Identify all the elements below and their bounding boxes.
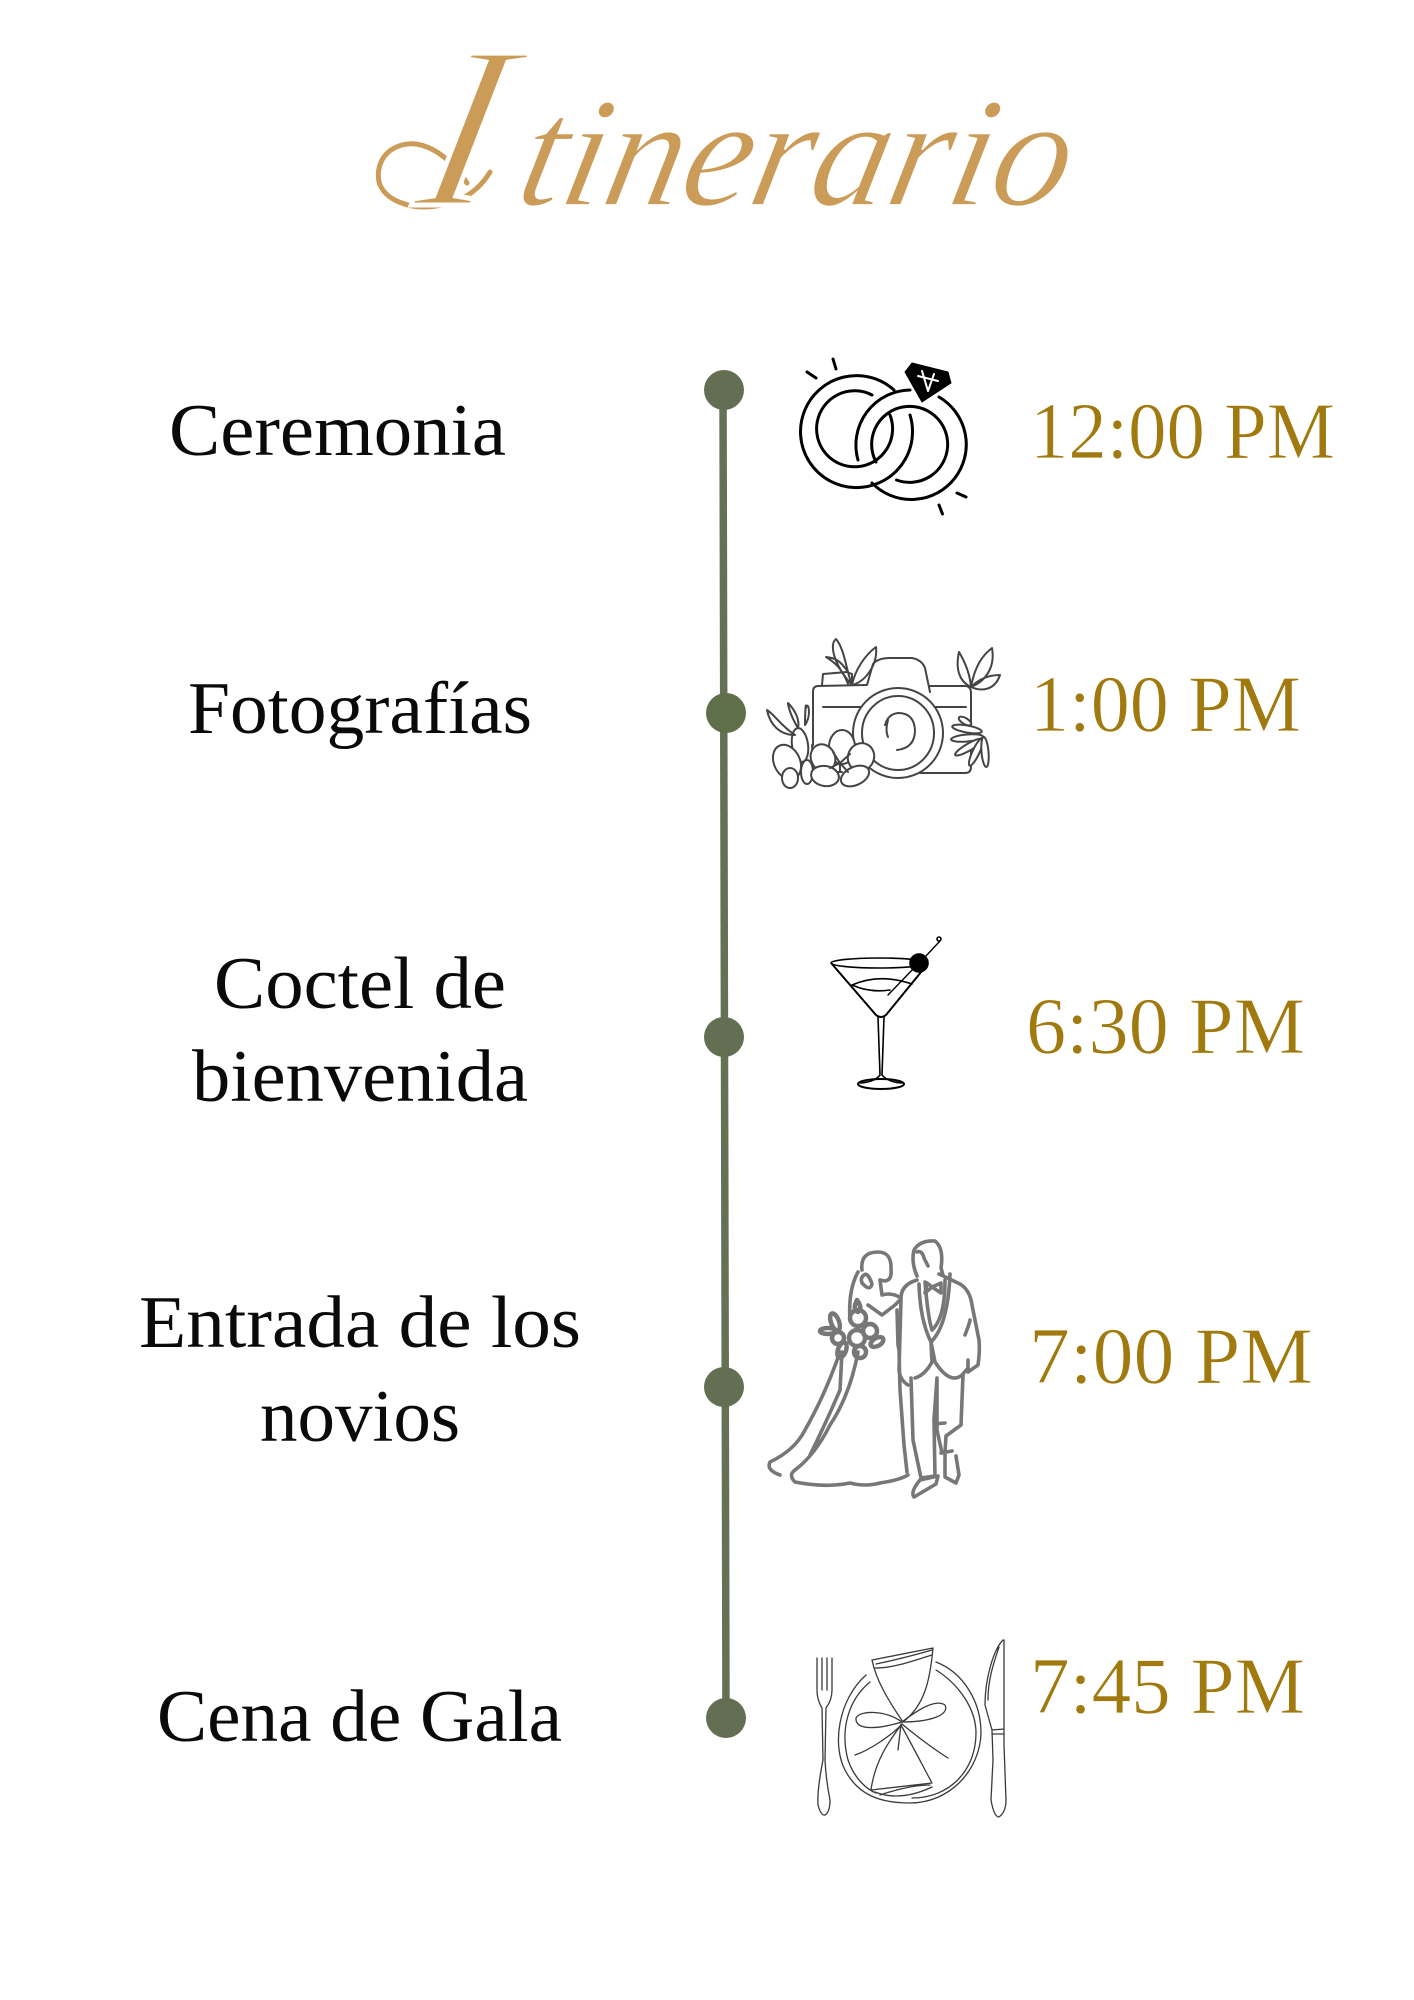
time: 7:00 PM: 7:00 PM — [1029, 1313, 1313, 1401]
label: Entrada de los novios — [139, 1282, 581, 1458]
title — [378, 0, 1106, 255]
icon: bride and groom — [769, 1241, 979, 1497]
label: Fotografías: Fotografías — [188, 668, 532, 750]
label: Coctel de bienvenida: Coctel de — [214, 943, 506, 1025]
time: 12:00 PM: 12:00 PM — [1030, 388, 1335, 476]
groom — [899, 1241, 979, 1497]
plate — [838, 1662, 981, 1803]
title: tinerario — [506, 67, 1092, 240]
title: I — [400, 0, 543, 255]
time: 7:45 PM: 7:45 PM — [1030, 1643, 1305, 1731]
napkin — [871, 1648, 933, 1796]
icon: wedding rings — [801, 359, 966, 514]
flower left — [767, 703, 813, 788]
bride — [769, 1252, 908, 1485]
icon: camera with flowers — [767, 639, 1000, 790]
bouquet — [820, 1300, 885, 1359]
time: 1:00 PM: 1:00 PM — [1030, 661, 1301, 749]
icon: martini glass — [831, 937, 941, 1089]
timeline — [704, 370, 746, 1738]
label: Entrada de los novios: Entrada de los — [139, 1282, 581, 1364]
label: Entrada de los novios: novios — [260, 1376, 460, 1458]
label: Ceremonia: Ceremonia — [169, 390, 506, 472]
fork — [817, 1658, 832, 1815]
knife — [985, 1640, 1006, 1817]
flower centre — [806, 730, 879, 790]
label: Cena de Gala: Cena de Gala — [157, 1676, 562, 1758]
bow — [855, 1703, 948, 1758]
time: 6:30 PM: 6:30 PM — [1026, 983, 1305, 1071]
label: Coctel de bienvenida — [192, 943, 528, 1118]
daisy — [951, 715, 990, 767]
label: Coctel de bienvenida: bienvenida — [192, 1036, 528, 1118]
icon: place setting with napkin — [817, 1640, 1006, 1817]
